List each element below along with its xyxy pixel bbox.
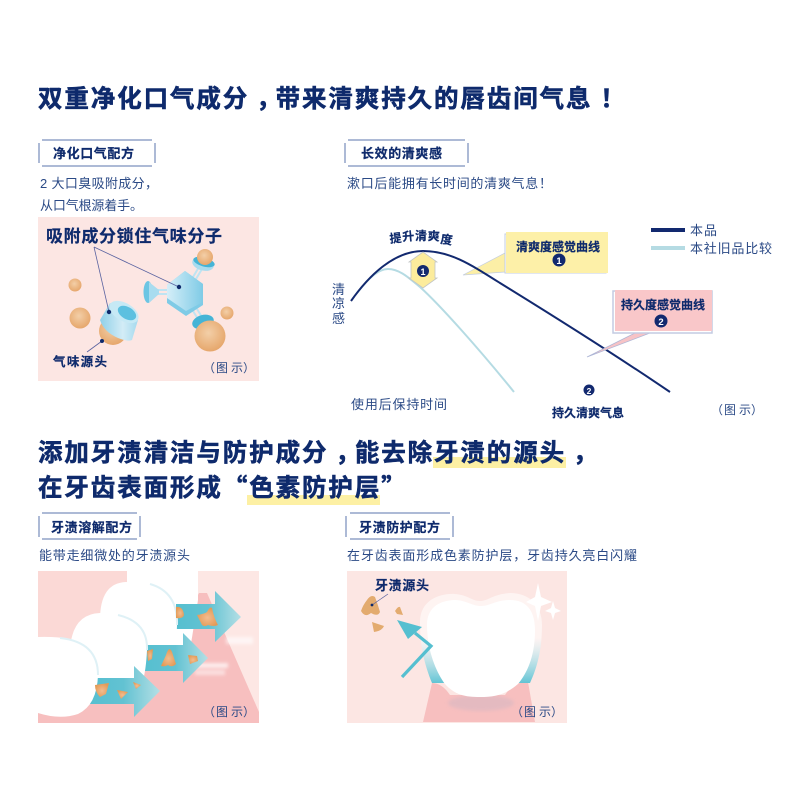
panel: stain protection illustration <box>347 571 567 723</box>
label: lasting freshness: 持久清爽气息 <box>552 405 624 420</box>
arrow: freshness lift <box>409 252 437 288</box>
legend: 本品 <box>690 223 717 238</box>
stain particles <box>361 596 403 632</box>
callout: freshness curve <box>505 232 608 273</box>
panel: stain dissolving illustration <box>38 571 259 723</box>
tag: stain dissolving formula: 牙渍溶解配方 <box>51 520 132 535</box>
tag: breath formula <box>39 140 155 166</box>
icon: hexagon molecule <box>144 249 226 352</box>
tag: breath formula: 净化口气配方 <box>53 146 134 161</box>
stain particles <box>95 607 218 699</box>
axis label: time: 使用后保持时间 <box>351 397 447 412</box>
text: stain protection description: 在牙齿表面形成色素防护层，牙齿持久亮白闪耀 <box>347 548 637 563</box>
text: adsorbing ingredients description: 从口气根源着手。 <box>40 198 143 213</box>
tag: stain protection formula: 牙渍防护配方 <box>359 520 440 535</box>
icon: cup molecule <box>99 296 142 345</box>
sparkles <box>526 583 561 621</box>
curve: this product <box>351 251 670 392</box>
light glints <box>195 637 253 675</box>
text: stain dissolving description: 能带走细微处的牙渍源头 <box>39 548 190 563</box>
curve: old product <box>357 269 514 392</box>
label: odor source: 气味源头 <box>53 354 107 369</box>
tooth: rear <box>127 571 198 650</box>
callout: freshness curve: 清爽度感觉曲线 <box>516 239 600 254</box>
legend <box>651 223 772 256</box>
legend: 本社旧品比较 <box>690 241 772 256</box>
callout: freshness curve: 1 <box>556 256 562 267</box>
arrow: middle <box>143 633 208 683</box>
tooth: middle <box>70 613 147 680</box>
callout: lasting curve: 2 <box>658 317 664 328</box>
headline: stain cleaning ingredients: 添加牙渍清洁与防护成分 ，能去除牙渍的源头 ， <box>38 438 599 467</box>
note: illustration: （图示） <box>711 403 763 417</box>
tag: stain protection formula <box>346 513 453 539</box>
chart: freshness curves <box>332 223 772 420</box>
text: adsorbing ingredients description: 2 大口臭吸附成分， <box>40 176 158 191</box>
arrow: freshness lift: 1 <box>420 267 426 277</box>
label: lasting freshness: 2 <box>587 386 592 396</box>
odor particles <box>68 278 234 328</box>
title: fresh breath ingredients: 双重净化口气成分 ，带来清爽持久的唇齿间气息 ！ <box>38 85 627 113</box>
callout: lasting curve <box>613 290 712 333</box>
note: illustration: （图示） <box>203 705 255 719</box>
label: stain source: 牙渍源头 <box>375 578 429 593</box>
gum <box>423 682 535 722</box>
callout: lasting curve: 持久度感觉曲线 <box>621 297 705 312</box>
pointer: yellow callout <box>463 253 505 275</box>
panel: adsorption illustration <box>38 217 259 381</box>
text: long lasting description: 漱口后能拥有长时间的清爽气息！ <box>347 176 552 191</box>
axis label: coolness: 清凉感 <box>332 282 345 326</box>
leader lines <box>87 247 181 352</box>
note: illustration: （图示） <box>511 705 563 719</box>
arrow: bottom <box>87 666 160 717</box>
pointer: pink callout <box>587 333 650 357</box>
arrow: top <box>176 591 241 642</box>
tooth: upper <box>100 582 177 670</box>
tag: long lasting freshness <box>345 140 468 166</box>
headline: stain cleaning ingredients: 在牙齿表面形成“色素防护层” <box>38 469 408 504</box>
text: adsorbing ingredients description <box>40 176 158 213</box>
tooth <box>427 600 535 697</box>
headline: stain cleaning ingredients <box>38 438 599 505</box>
tooth: front <box>38 637 98 717</box>
tag: stain dissolving formula <box>39 513 140 539</box>
label: lasting freshness <box>552 384 624 420</box>
label: stain source <box>371 578 429 606</box>
gums <box>38 593 259 723</box>
label: raised freshness: 提升清爽度 <box>389 228 454 248</box>
note: illustration: （图示） <box>203 361 255 375</box>
panel heading: 吸附成分锁住气味分子 <box>46 226 222 246</box>
tag: long lasting freshness: 长效的清爽感 <box>361 146 442 161</box>
arrow: barrier rebound <box>397 620 431 677</box>
tooth halo <box>420 593 542 683</box>
